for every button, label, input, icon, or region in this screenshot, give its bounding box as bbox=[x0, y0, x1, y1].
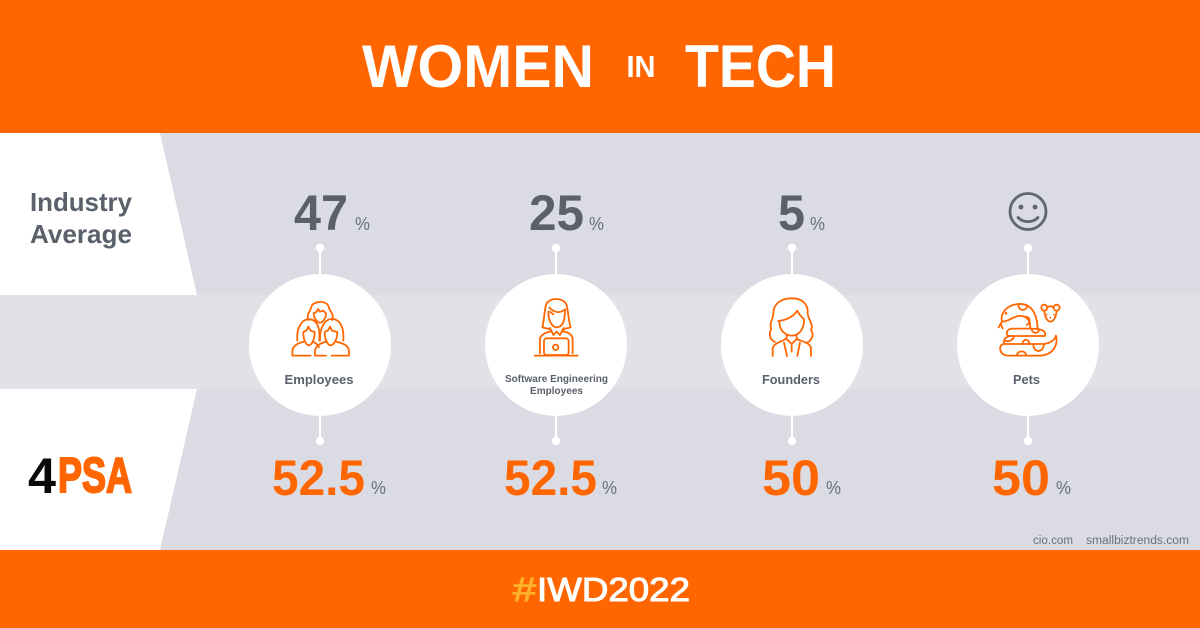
circle bbox=[249, 274, 391, 416]
label: Pets bbox=[1013, 372, 1040, 387]
logo: 4PSA: 4 bbox=[28, 448, 56, 504]
value: industry founders 5%: 5 bbox=[778, 185, 805, 241]
label: Founders bbox=[762, 372, 820, 387]
icon: woman at laptop bbox=[535, 299, 578, 356]
value: 4PSA founders 50%: 50 bbox=[762, 450, 820, 506]
value: industry founders 5%: % bbox=[810, 214, 825, 234]
value: 4PSA pets 50%: % bbox=[1056, 478, 1071, 498]
circle bbox=[957, 274, 1099, 416]
row heading: industry average: Average bbox=[30, 219, 132, 249]
value: 4PSA employees 52.5%: 52.5 bbox=[272, 450, 365, 506]
sources bbox=[1033, 535, 1189, 547]
value: 4PSA engineers 52.5%: % bbox=[602, 478, 617, 498]
circle bbox=[485, 274, 627, 416]
footer band bbox=[0, 550, 1200, 628]
column: software engineering employees bbox=[485, 185, 627, 506]
sources: smallbiztrends.com bbox=[1086, 535, 1189, 547]
label: Employees bbox=[530, 385, 583, 397]
connector bbox=[316, 244, 324, 445]
row label panel: industry average bbox=[0, 133, 197, 295]
title: WOMEN bbox=[362, 33, 594, 100]
logo: 4PSA: PSA bbox=[58, 449, 132, 503]
sources: cio.com bbox=[1033, 535, 1073, 547]
hashtag: IWD2022 bbox=[537, 571, 690, 608]
value: industry founders 5% bbox=[778, 185, 825, 241]
icon: three women bbox=[292, 302, 349, 356]
value: 4PSA pets 50%: 50 bbox=[992, 450, 1050, 506]
hashtag: # bbox=[513, 571, 537, 608]
row label panel: 4PSA bbox=[0, 389, 197, 550]
main grey panel bbox=[0, 133, 1200, 550]
middle light band bbox=[0, 295, 1200, 389]
column: pets bbox=[957, 194, 1099, 506]
value: industry employees 47%: % bbox=[355, 214, 370, 234]
icon: snake and mouse bbox=[999, 304, 1060, 356]
header band bbox=[0, 0, 1200, 133]
value: 4PSA engineers 52.5%: 52.5 bbox=[504, 450, 597, 506]
label: Software Engineering bbox=[505, 373, 608, 385]
icon: woman founder bbox=[770, 298, 813, 356]
icon: smiley bbox=[1010, 194, 1046, 230]
title: IN bbox=[626, 49, 656, 84]
logo: 4PSA bbox=[28, 448, 132, 504]
value: industry engineers 25%: 25 bbox=[529, 185, 584, 241]
circle bbox=[721, 274, 863, 416]
label bbox=[505, 373, 608, 397]
value: 4PSA founders 50%: % bbox=[826, 478, 841, 498]
title: TECH bbox=[685, 33, 836, 100]
connector bbox=[788, 244, 796, 445]
value: industry engineers 25%: % bbox=[589, 214, 604, 234]
column: founders bbox=[721, 185, 863, 506]
connector bbox=[1024, 244, 1032, 445]
connector bbox=[552, 244, 560, 445]
value: industry employees 47%: 47 bbox=[294, 185, 348, 241]
value: 4PSA employees 52.5%: % bbox=[371, 478, 386, 498]
column: employees bbox=[249, 185, 391, 506]
title bbox=[362, 33, 836, 100]
row heading: industry average bbox=[30, 187, 133, 249]
row heading: industry average: Industry bbox=[30, 187, 133, 217]
label: Employees bbox=[284, 372, 354, 387]
